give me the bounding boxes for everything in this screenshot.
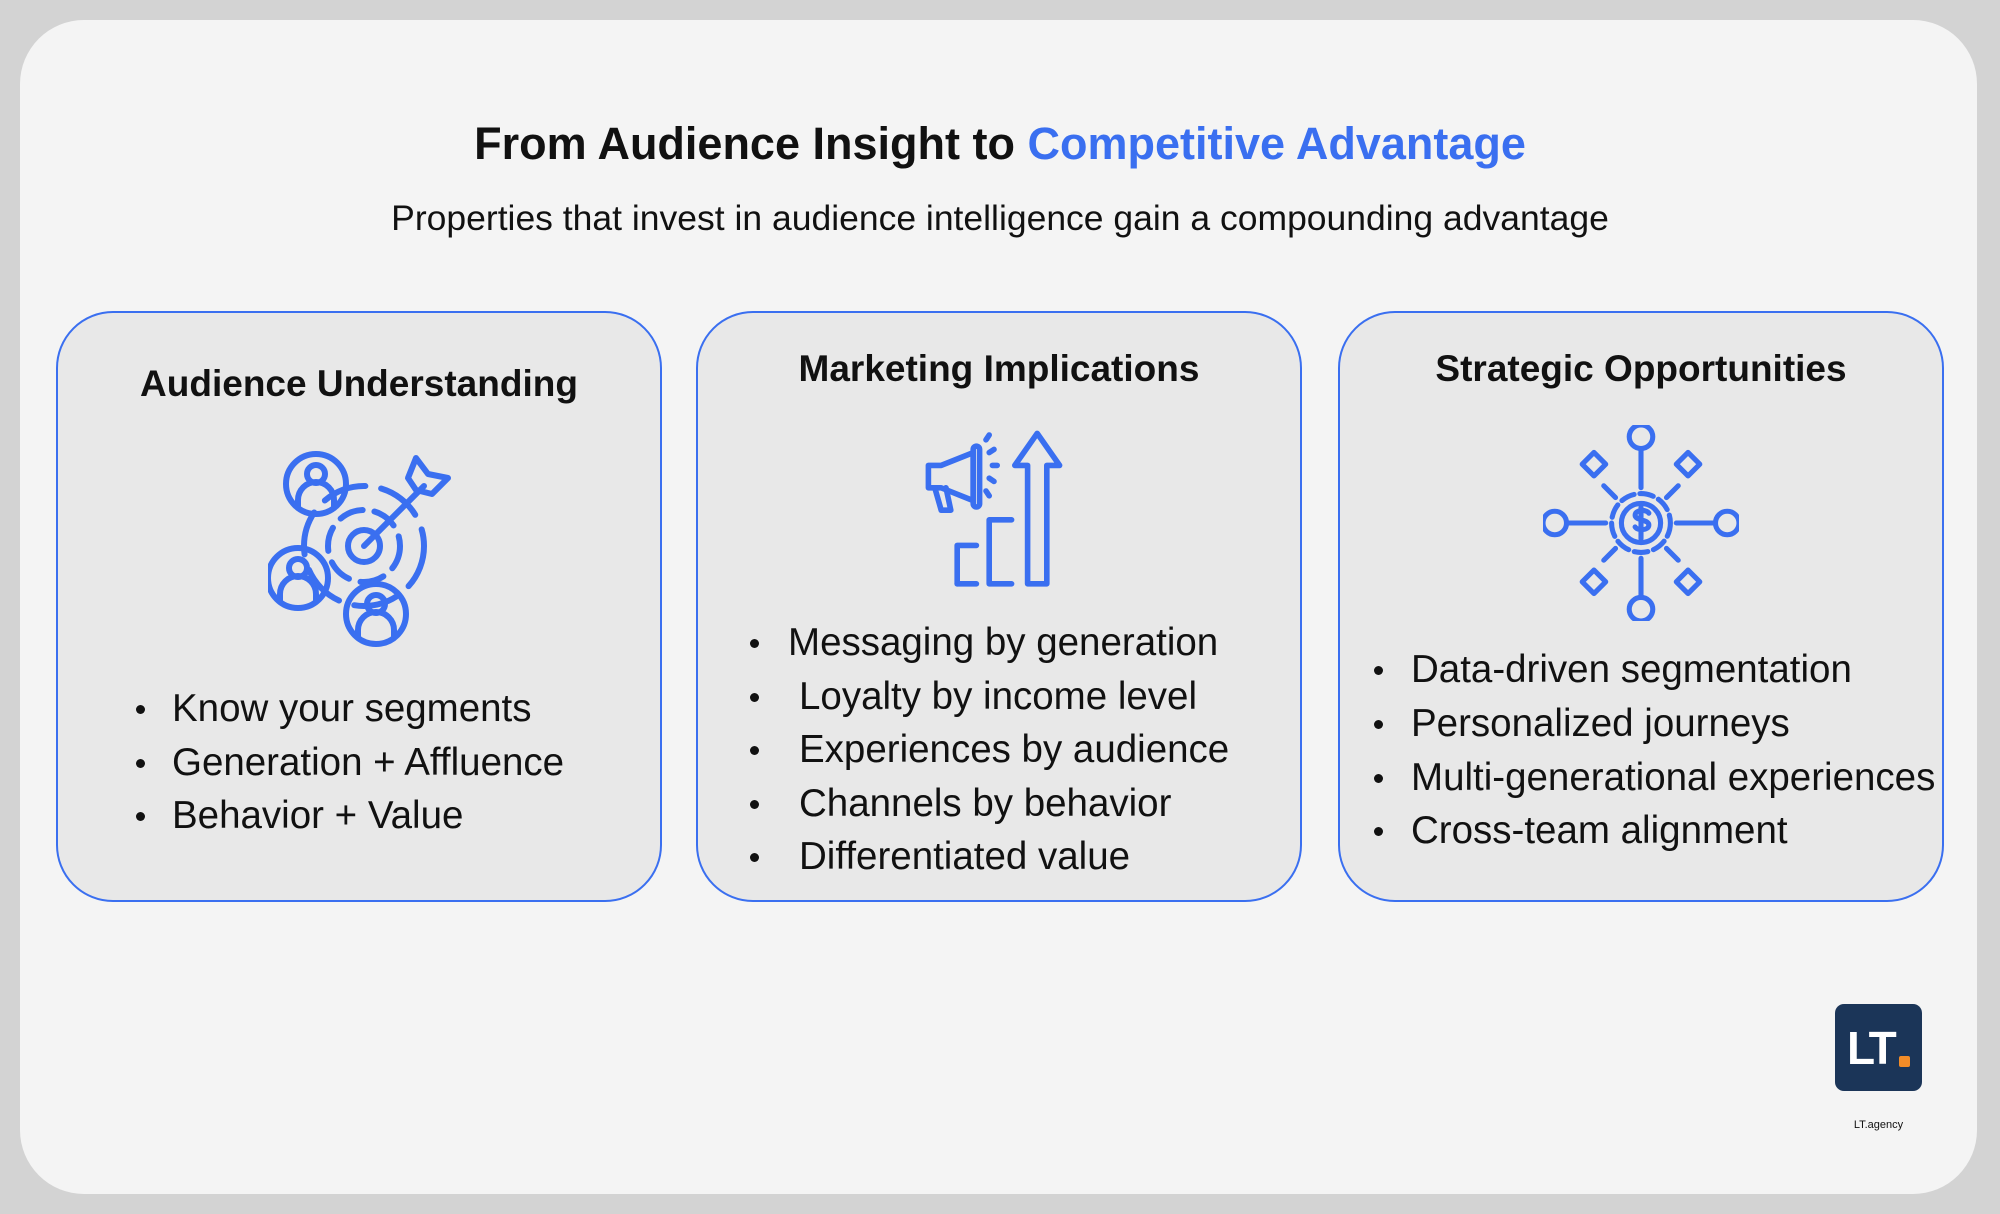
panel: marketing implications <box>696 311 1302 902</box>
subtitle: Properties that invest in audience intelligence gain a compounding advantage <box>391 198 1609 238</box>
panel: marketing implications: Channels by behavior <box>799 782 1171 825</box>
bullet list <box>1374 648 1935 852</box>
heading: strategic opportunities: Strategic Opportunities <box>1435 348 1847 389</box>
panel: audience understanding: Behavior + Value <box>172 794 463 837</box>
icon: target with people <box>268 451 451 647</box>
heading: marketing implications: Marketing Implications <box>799 348 1199 389</box>
logo: LT.agency: LT.agency <box>1854 1119 1903 1131</box>
icon: gear with dollar network <box>1543 425 1739 621</box>
title: From Audience Insight to Competitive Advantage <box>474 118 1526 169</box>
panel: strategic opportunities: Multi-generational experiences <box>1411 756 1935 799</box>
panel: audience understanding <box>56 311 662 902</box>
logo: LT.agency <box>1835 1004 1922 1131</box>
panel: marketing implications: Loyalty by income level <box>799 675 1197 718</box>
bullet list <box>750 621 1229 878</box>
panel: marketing implications: Differentiated value <box>799 835 1130 878</box>
panel: strategic opportunities: Personalized journeys <box>1411 702 1790 745</box>
bullet list <box>136 687 564 837</box>
panel: audience understanding: Know your segments <box>172 687 532 730</box>
panel: marketing implications: Experiences by audience <box>799 728 1229 771</box>
panel: marketing implications: Messaging by generation <box>788 621 1218 664</box>
heading: audience understanding: Audience Understanding <box>140 363 578 404</box>
icon: megaphone with growth arrow <box>926 430 1062 587</box>
logo: LT.agency: LT <box>1847 1022 1894 1074</box>
panel: strategic opportunities: Cross-team alignment <box>1411 809 1788 852</box>
panel: strategic opportunities <box>1338 311 1944 902</box>
panel: audience understanding: Generation + Affluence <box>172 741 564 784</box>
panel: strategic opportunities: Data-driven segmentation <box>1411 648 1852 691</box>
